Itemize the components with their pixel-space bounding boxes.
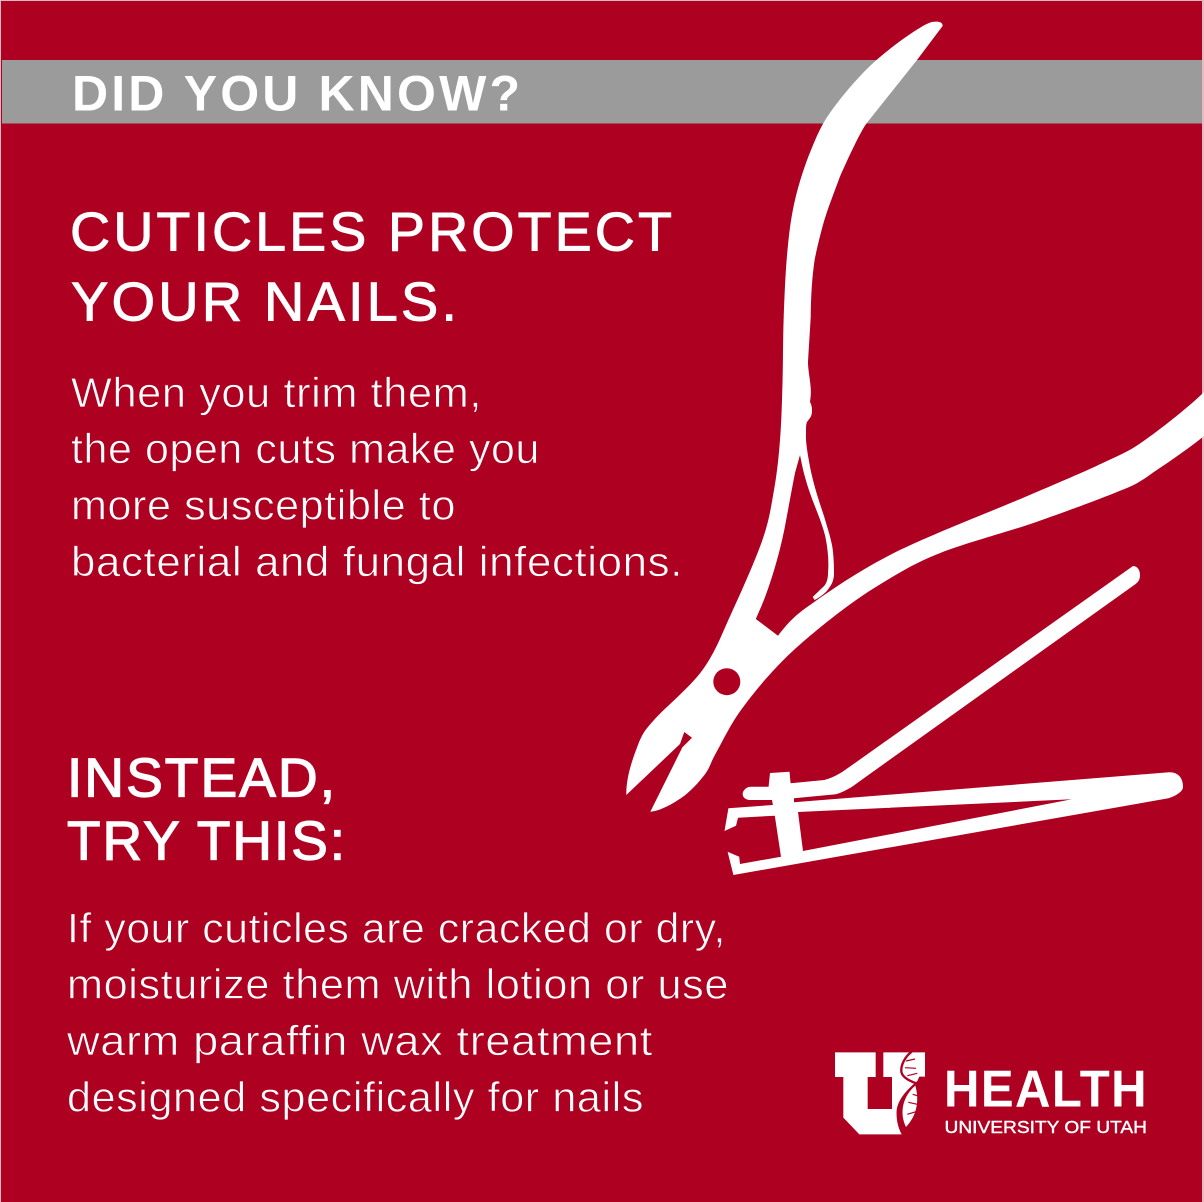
text block: moisturizing advice: If your cuticles are cracked or dry, <box>67 904 726 952</box>
text block: why trimming is risky: more susceptible to <box>71 481 456 528</box>
logo: University of Utah Health <box>835 1052 1148 1137</box>
grey banner <box>2 60 1202 124</box>
heading: cuticles protect your nails <box>70 200 675 332</box>
text block: why trimming is risky: the open cuts make you <box>71 425 540 472</box>
logo wordmark: University of Utah: UNIVERSITY OF UTAH <box>944 1117 1147 1137</box>
text block: moisturizing advice: moisturize them with lotion or use <box>67 960 729 1008</box>
text block: moisturizing advice: warm paraffin wax treatment <box>66 1017 653 1064</box>
logo mark: block U with DNA helix <box>835 1052 925 1134</box>
text block: moisturizing advice <box>66 904 729 1120</box>
text block: why trimming is risky <box>71 369 683 585</box>
text block: why trimming is risky: bacterial and fungal infections. <box>71 538 683 585</box>
text block: moisturizing advice: designed specifically for nails <box>67 1074 644 1120</box>
heading: cuticles protect your nails: CUTICLES PROTECT <box>70 200 675 262</box>
banner heading: DID YOU KNOW? <box>72 66 520 122</box>
icon: nail clipper <box>724 566 1183 875</box>
text block: why trimming is risky: When you trim them, <box>71 369 482 416</box>
heading: cuticles protect your nails: YOUR NAILS. <box>71 270 460 332</box>
heading: instead, try this <box>67 746 347 872</box>
logo wordmark: HEALTH: HEALTH <box>944 1060 1148 1118</box>
heading: instead, try this: INSTEAD, <box>67 746 337 808</box>
icon: cuticle nippers <box>626 22 1204 812</box>
heading: instead, try this: TRY THIS: <box>67 810 347 872</box>
